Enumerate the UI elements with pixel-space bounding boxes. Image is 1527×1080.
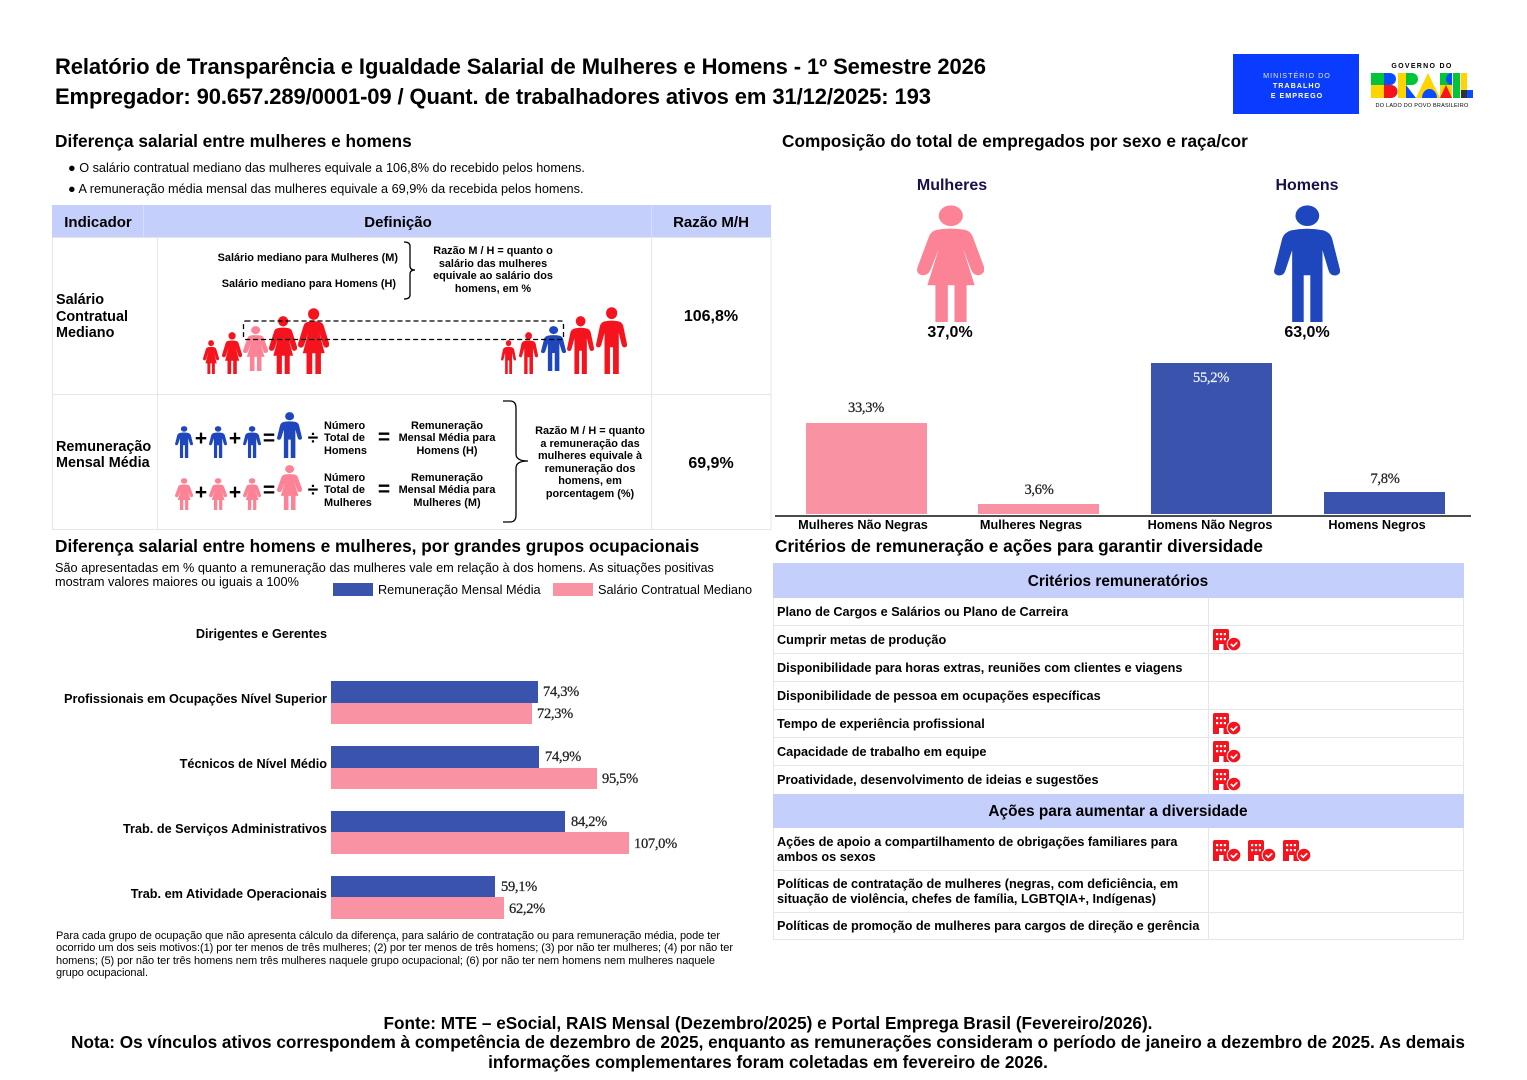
icon: building check, equipe: [1213, 741, 1241, 763]
table header: Razão M/H: [673, 214, 749, 231]
logo: Ministério do Trabalho e Emprego: E EMPREGO: [1271, 91, 1323, 100]
logo: Governo do Brasil: [1371, 63, 1473, 109]
criteria rows: Plano de Cargos e Salários ou Plano de Carreira: [777, 605, 1069, 619]
row label: salário contratual mediano: Contratual: [56, 309, 128, 325]
brace and ratio definition: Razão M / H = quanto: [535, 425, 645, 437]
footnote on occupational groups: homens; (5) por não ter três homens nem três mulheres naquele grupo ocupacional; (6) por não ter nem homens nem mulheres naquele: [56, 955, 715, 967]
source note: informações complementares foram coletadas em fevereiro de 2026.: [488, 1052, 1048, 1072]
row label: salário contratual mediano: [56, 292, 128, 341]
formula: remuneração homens: +: [229, 427, 241, 450]
legend: Salário Contratual Mediano: [598, 582, 752, 597]
legend: [333, 582, 752, 597]
category: profissionais: Profissionais em Ocupações Nível Superior: [64, 692, 327, 706]
criteria rows: Disponibilidade de pessoa em ocupações específicas: [777, 689, 1101, 703]
formula: remuneração mulheres: Mensal Média para: [399, 484, 496, 496]
icon: building check, experiência: [1213, 713, 1241, 735]
category: serviços administrativos: [123, 811, 677, 854]
panel: homens share: Homens: [1275, 177, 1339, 194]
brace and ratio definition: a remuneração das: [540, 438, 640, 450]
row label: remuneração mensal média: Remuneração: [56, 439, 151, 455]
description text: [55, 560, 714, 589]
panel: mulheres share: [917, 177, 987, 341]
formula: remuneração homens: Homens (H): [416, 445, 478, 457]
header: critérios remuneratórios: [773, 563, 1464, 598]
category: técnicos: [180, 746, 638, 789]
table header: Definição: [364, 214, 432, 231]
row label: salário contratual mediano: Mediano: [56, 325, 115, 341]
panel: indicator table: [52, 205, 771, 530]
formula: remuneração mulheres: +: [195, 481, 207, 504]
formula: remuneração homens: +: [195, 427, 207, 450]
formula: remuneração mulheres: =: [378, 478, 390, 501]
panel: homens share: 63,0%: [1284, 324, 1330, 341]
source note: Nota: Os vínculos ativos correspondem à competência de dezembro de 2025, enquanto as remunerações consideram o período de janeiro a dezembro de 2025. As demais: [71, 1032, 1465, 1052]
panel: mulheres share: Mulheres: [917, 177, 987, 194]
criteria rows: [777, 605, 1182, 787]
brace and ratio definition: homens, em: [558, 475, 622, 487]
bullet text block: ● A remuneração média mensal das mulheres equivale a 69,9% da recebida pelos homens.: [68, 182, 583, 196]
bar chart: composition by race: Homens Negros: [1328, 518, 1426, 532]
category: profissionais: [64, 681, 579, 724]
action rows: Ações de apoio a compartilhamento de obrigações familiares para: [777, 835, 1178, 849]
title: [55, 54, 986, 109]
logo: Ministério do Trabalho e Emprego: [1233, 54, 1359, 114]
action rows: Políticas de contratação de mulheres (negras, com deficiência, em: [777, 877, 1178, 891]
formula: remuneração mulheres: Mulheres (M): [413, 497, 481, 509]
header: ações para diversidade: [773, 794, 1464, 828]
footnote on occupational groups: Para cada grupo de ocupação que não apresenta cálculo da diferença, para salário de contratação ou para remuneração média, pode ter: [56, 930, 720, 942]
definition text: salário mediano: equivale ao salário dos: [433, 270, 553, 282]
title: Relatório de Transparência e Igualdade Salarial de Mulheres e Homens - 1º Semestre 2026: [55, 54, 986, 79]
footnote on occupational groups: [56, 930, 733, 979]
category: técnicos: 95,5%: [602, 771, 638, 787]
icon: man: [1274, 205, 1340, 322]
icon group: median women and men: [203, 307, 627, 374]
action rows: situação de violência, chefes de família, LGBTQIA+, Indígenas): [777, 892, 1156, 906]
definition text: salário mediano: [218, 242, 553, 299]
panel: mulheres share: 37,0%: [927, 324, 973, 341]
heading: critérios: Critérios de remuneração e ações para garantir diversidade: [775, 536, 1263, 556]
title: Empregador: 90.657.289/0001-09 / Quant. de trabalhadores ativos em 31/12/2025: 193: [55, 84, 931, 109]
brace and ratio definition: remuneração dos: [545, 463, 635, 475]
formula: remuneração homens: ÷: [308, 428, 318, 449]
heading: composição: Composição do total de empregados por sexo e raça/cor: [782, 131, 1248, 151]
source note: [71, 1013, 1465, 1072]
bar chart: composition by race: 7,8%: [1370, 471, 1400, 487]
category: dirigentes e gerentes: Dirigentes e Gerentes: [196, 627, 327, 641]
category: atividade operacional: 59,1%: [501, 879, 537, 895]
formula: remuneração homens: =: [378, 426, 390, 449]
heading: grupos ocupacionais: Diferença salarial entre homens e mulheres, por grandes grupos ocupacionais: [55, 536, 699, 556]
category: técnicos: 74,9%: [545, 749, 581, 765]
header: ações para diversidade: Ações para aumentar a diversidade: [988, 803, 1248, 820]
panel: homens share: [1274, 177, 1340, 341]
row label: remuneração mensal média: [56, 439, 151, 471]
bar chart: composition by race: Homens Não Negros: [1148, 518, 1272, 532]
logo: Ministério do Trabalho e Emprego: MINISTÉRIO DO: [1263, 71, 1331, 80]
legend: Remuneração Mensal Média: [378, 582, 542, 597]
bullet text block: ● O salário contratual mediano das mulheres equivale a 106,8% do recebido pelos homens.: [68, 161, 585, 175]
value: 69,9%: 69,9%: [688, 455, 734, 472]
category: serviços administrativos: Trab. de Serviços Administrativos: [123, 822, 327, 836]
category: serviços administrativos: 107,0%: [634, 836, 677, 852]
row label: salário contratual mediano: Salário: [56, 292, 104, 308]
logo: Ministério do Trabalho e Emprego: TRABALHO: [1273, 81, 1321, 90]
category: atividade operacional: 62,2%: [509, 901, 545, 917]
table header: Indicador: [64, 214, 132, 231]
formula: remuneração homens: Mensal Média para: [399, 432, 496, 444]
formula: remuneração homens: Homens: [324, 445, 367, 457]
footnote on occupational groups: grupo ocupacional.: [56, 967, 148, 979]
definition text: salário mediano: homens, em %: [455, 283, 531, 295]
bar chart: composition by race: 33,3%: [848, 400, 884, 416]
formula: remuneração homens: Número: [324, 420, 365, 432]
footnote on occupational groups: ocorrido um dos seis motivos:(1) por ter menos de três mulheres; (2) por ter menos de três homens; (3) por não ter mulheres; (4) por não ter: [56, 942, 733, 954]
formula: remuneração mulheres: Número: [324, 472, 365, 484]
formula: remuneração mulheres: ÷: [308, 480, 318, 501]
action rows: [777, 835, 1200, 933]
bar chart: occupational groups: [64, 627, 677, 919]
category: atividade operacional: Trab. em Atividade Operacionais: [131, 887, 327, 901]
formula: remuneração homens: [175, 412, 496, 458]
source note: Fonte: MTE – eSocial, RAIS Mensal (Dezembro/2025) e Portal Emprega Brasil (Fevereiro/2026).: [384, 1013, 1152, 1033]
action rows: ambos os sexos: [777, 850, 876, 864]
category: técnicos: Técnicos de Nível Médio: [180, 757, 327, 771]
definition text: salário mediano: Salário mediano para Mulheres (M): [218, 252, 398, 264]
value: 106,8%: 106,8%: [684, 308, 738, 325]
criteria rows: Cumprir metas de produção: [777, 633, 946, 647]
row label: remuneração mensal média: Mensal Média: [56, 455, 151, 471]
bar chart: composition by race: Mulheres Negras: [980, 518, 1082, 532]
formula: remuneração mulheres: =: [263, 479, 275, 502]
bar chart: composition by race: 3,6%: [1024, 482, 1054, 498]
icon: building check, proatividade: [1213, 769, 1241, 791]
criteria rows: Capacidade de trabalho em equipe: [777, 745, 986, 759]
bar chart: composition by race: [775, 363, 1471, 532]
bar chart: composition by race: 55,2%: [1193, 370, 1229, 386]
criteria rows: Proatividade, desenvolvimento de ideias e sugestões: [777, 773, 1099, 787]
bullet text block: [68, 161, 585, 196]
header: critérios remuneratórios: Critérios remuneratórios: [1028, 573, 1208, 590]
formula: remuneração homens: =: [263, 427, 275, 450]
definition text: salário mediano: Salário mediano para Homens (H): [222, 278, 396, 290]
formula: remuneração mulheres: Remuneração: [411, 472, 483, 484]
category: profissionais: 74,3%: [543, 684, 579, 700]
logo: Governo do Brasil: GOVERNO DO: [1391, 63, 1453, 70]
criteria rows: Disponibilidade para horas extras, reuniões com clientes e viagens: [777, 661, 1182, 675]
panel: criteria table: [773, 563, 1464, 940]
category: atividade operacional: [131, 876, 545, 919]
brace and ratio definition: mulheres equivale à: [538, 450, 643, 462]
category: profissionais: 72,3%: [537, 706, 573, 722]
formula: remuneração mulheres: +: [229, 481, 241, 504]
definition text: salário mediano: salário das mulheres: [439, 258, 547, 270]
brace and ratio definition: [503, 401, 645, 522]
definition text: salário mediano: Razão M / H = quanto o: [433, 245, 553, 257]
category: serviços administrativos: 84,2%: [571, 814, 607, 830]
action rows: Políticas de promoção de mulheres para cargos de direção e gerência: [777, 919, 1200, 933]
description text: São apresentadas em % quanto a remuneração das mulheres vale em relação à dos homens. As situações positivas: [55, 560, 714, 575]
table header: [52, 205, 771, 237]
logo: Governo do Brasil: DO LADO DO POVO BRASILEIRO: [1376, 103, 1469, 109]
icons: three building checks: [1213, 840, 1311, 862]
icon: building check, metas: [1213, 629, 1241, 651]
brace and ratio definition: porcentagem (%): [546, 488, 635, 500]
formula: remuneração homens: Remuneração: [411, 420, 483, 432]
criteria rows: Tempo de experiência profissional: [777, 717, 985, 731]
icon: woman: [917, 205, 984, 322]
heading: diferença salarial: Diferença salarial entre mulheres e homens: [55, 131, 412, 151]
formula: remuneração mulheres: Mulheres: [324, 497, 372, 509]
bar chart: composition by race: Mulheres Não Negras: [798, 518, 928, 532]
description text: mostram valores maiores ou iguais a 100%: [55, 574, 299, 589]
formula: remuneração homens: Total de: [324, 432, 365, 444]
formula: remuneração mulheres: [175, 465, 496, 510]
formula: remuneração mulheres: Total de: [324, 484, 365, 496]
